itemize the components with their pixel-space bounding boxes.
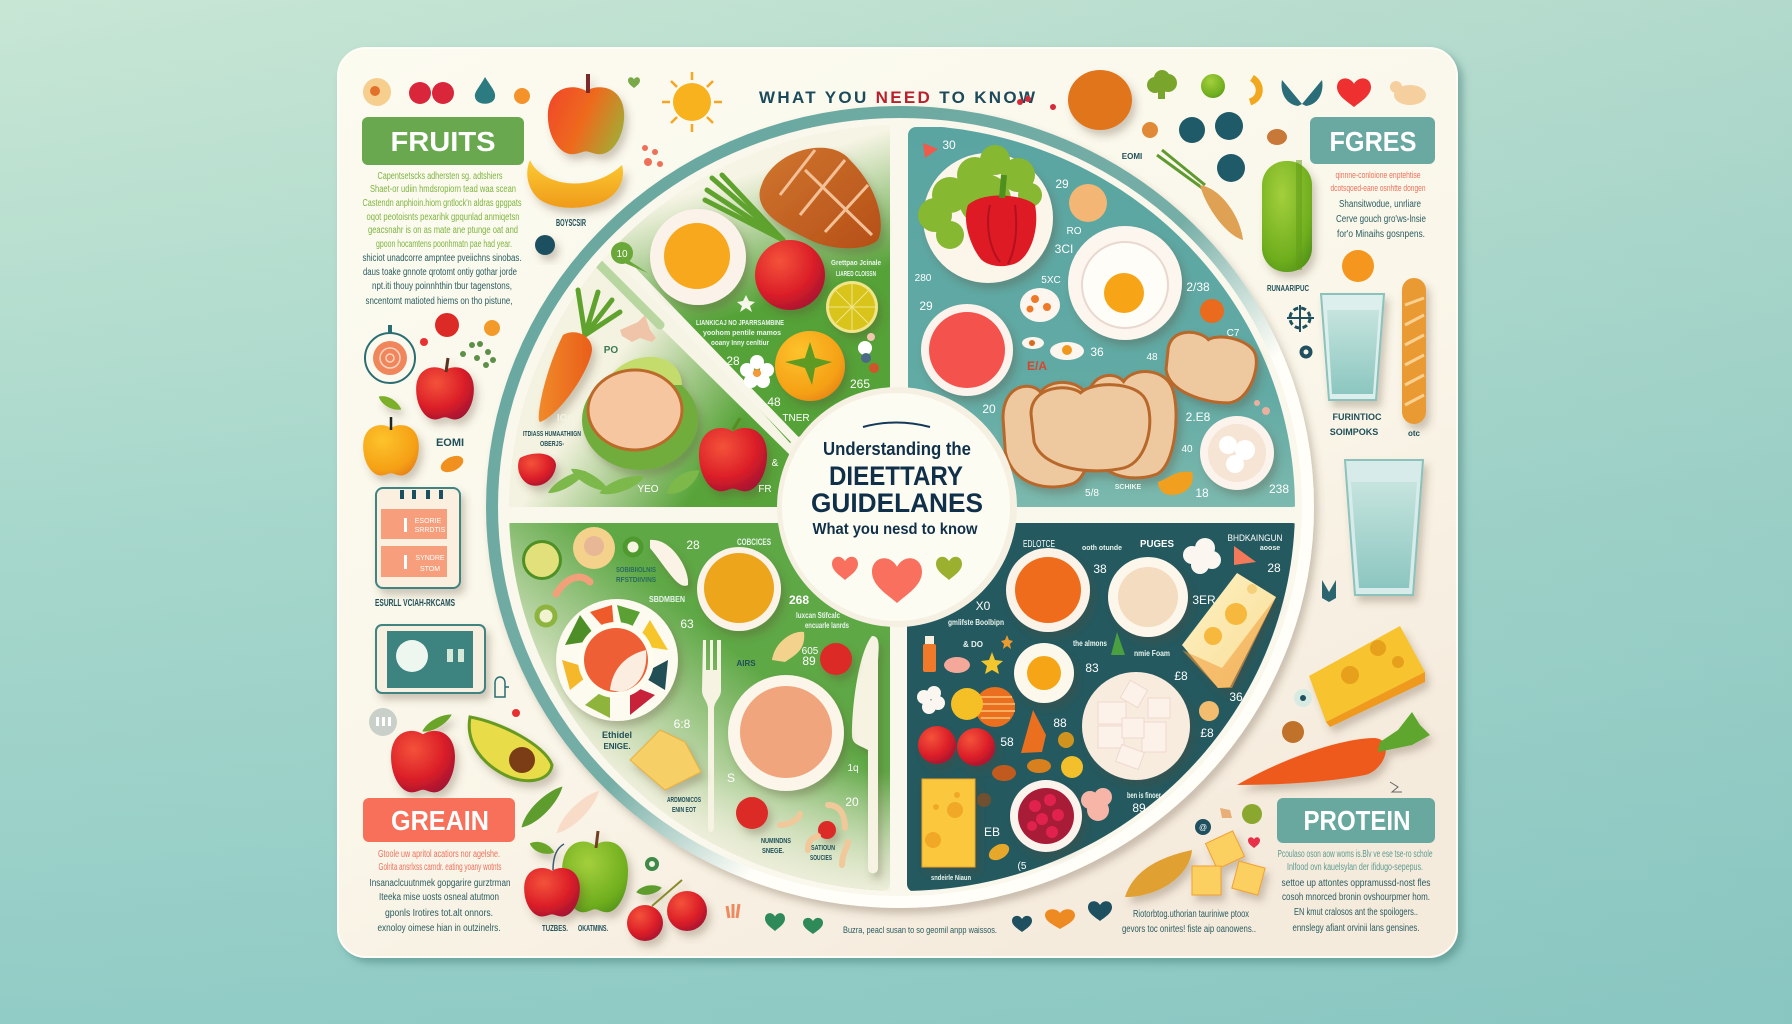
icon: small dish (1020, 288, 1060, 322)
icon: red heart (1248, 837, 1260, 848)
label: notepad caption: ESURLL VCIAH-RKCAMS (375, 598, 455, 609)
icon: lettuce bits (545, 464, 704, 499)
icon: orange wedge (1021, 710, 1046, 753)
text block: fgres description: Shansitwodue, unrliare (1339, 199, 1421, 210)
text: bottom-left labels: SATIOUN (811, 845, 835, 852)
icon: cucumber (522, 540, 562, 580)
text: bottom caption: Buzra, peacl susan to so geomil anpp waissos. (843, 925, 997, 935)
text block: fgres description: Cerve gouch gro'ws-lnsie (1336, 214, 1426, 225)
icon: bottom-left apple (391, 711, 455, 792)
hub title text: GUIDELANES (811, 488, 983, 518)
icon: bread loaf (760, 148, 881, 248)
text block: fgres description: qinnne-conloione enptehtise (1336, 170, 1420, 180)
text: top-left labels: TNER (782, 413, 810, 424)
icon: small balls (977, 701, 1219, 864)
section: grain (363, 782, 1112, 941)
text: top-left labels: PO (604, 345, 618, 356)
text block: fruits description: oqot peotoisnts pexarihk gpqunlad anmiqetsn (366, 212, 520, 223)
text: bottom-left labels: SOUCIES (810, 855, 832, 862)
label: eomi right: EOMI (1122, 152, 1142, 161)
label: glass caption (1330, 412, 1421, 438)
icon: pink fish (944, 657, 970, 673)
icon: pink leaf (552, 786, 604, 838)
icon: yellow swirl (1250, 78, 1259, 102)
icon: cauliflower small (917, 686, 945, 714)
icon: large apple (548, 74, 624, 154)
icon: pink curls (780, 805, 848, 865)
text block: fruits description: gpoon hocamtens poonhmatn pae had year. (376, 239, 512, 250)
icon: wheat (1157, 150, 1243, 240)
label: vegetable caption: RUNAARIPUC (1267, 284, 1309, 293)
card panel (338, 48, 1457, 957)
label: glass caption: SOIMPOKS (1330, 427, 1378, 437)
text: bottom-left labels: encuarle lanrds (805, 621, 849, 630)
text: bottom-right labels: sndeirle Niaun (931, 875, 971, 882)
icon: red apple (416, 358, 474, 419)
icon: yellow tomato (775, 331, 845, 401)
text block: protein description: EN kmut cralosos ant the spoilogers.. (1294, 907, 1418, 918)
label: glass caption: otc (1408, 429, 1421, 438)
text: bottom-right labels: the almons (1073, 639, 1107, 648)
text: bottom-right labels (931, 533, 1282, 882)
label: eomi: EOMI (436, 437, 464, 449)
icon: cracker cheese (630, 730, 701, 790)
icon: green herb (1242, 804, 1262, 824)
icon: nut (1069, 184, 1107, 222)
icon: red dots (1017, 96, 1056, 110)
panel: top-right teal quadrant (908, 127, 1300, 507)
text: bottom-right labels: 83 (1085, 661, 1099, 675)
text: bottom-right labels: aoose (1260, 545, 1280, 552)
text: top-right numbers: 20 (982, 402, 996, 416)
top-right foods (915, 138, 1289, 500)
icon: shrimp (556, 577, 590, 594)
text: bottom-left labels (602, 537, 859, 862)
icon: blueberries (1179, 112, 1245, 182)
text: bottom-right labels: PUGES (1140, 539, 1174, 550)
text: top-right numbers: C7 (1227, 328, 1240, 339)
text: top-left labels: 48 (767, 395, 781, 409)
icon: beige bowl (1108, 557, 1188, 637)
icon: donut (363, 78, 391, 106)
icon: grey circle (369, 708, 397, 736)
icon: notepad: SRRDTIS (415, 527, 446, 534)
icon: at badge: @ (1199, 823, 1207, 832)
text: bottom-right labels: (5 (1018, 861, 1027, 872)
text: bottom-left labels: RFSTDIIVINS (616, 577, 656, 584)
icon: notepad: STOM (420, 566, 440, 573)
icon: tag 10 (611, 242, 648, 273)
icon: water glass (1321, 294, 1384, 400)
icon: ginger (620, 315, 656, 342)
text block: fruits description (362, 171, 522, 307)
icon: butterfly (1282, 80, 1322, 106)
text: top-left labels: FR (758, 484, 772, 495)
text: top-right numbers: 29 (1055, 177, 1069, 191)
icon: large glass (1345, 460, 1423, 595)
icon: layered cake (1111, 632, 1125, 655)
icon: lemon slice (826, 281, 878, 333)
icon: eye badge (1294, 689, 1312, 707)
text: bottom-left labels: 63 (680, 617, 694, 631)
text: top-left labels: OBERJS- (540, 441, 565, 448)
icon: flower (740, 355, 774, 388)
icon: green ring (647, 859, 657, 869)
icon: green stalks (705, 175, 783, 240)
label: grain (363, 798, 515, 842)
text block: fgres description: dcotsqoed-eane osnhtte dongen (1330, 183, 1426, 193)
text block: fruits description: Shaet-or udiin hmdsropiorn tead waa scean (370, 184, 516, 195)
text: bottom-left labels: SBDMBEN (649, 595, 685, 604)
text: top-right numbers (915, 138, 1289, 500)
icon: water drop (475, 77, 495, 104)
icon: orange oval (438, 453, 466, 475)
text: top-right numbers: 18 (1195, 486, 1209, 500)
icon: clock (365, 325, 415, 383)
label: apple captions (542, 924, 608, 933)
hub circle (777, 387, 1017, 627)
icon: cheese block (922, 779, 975, 867)
icon: green bits (460, 341, 496, 368)
text: top-right numbers: 5/8 (1085, 488, 1099, 499)
icon: yellow nut (1158, 472, 1193, 495)
text: bottom-right labels: & DO (963, 640, 983, 649)
hub hearts (832, 557, 962, 603)
text block: grain description: Golrita ansrlxss carndr. eating yoany wotnts (378, 862, 502, 873)
icon: lettuce and bread (582, 357, 698, 470)
text: bottom-left labels: 1q (847, 763, 859, 774)
icon: green swirl (625, 539, 641, 555)
text: top-left labels: LIANKICAJ NO JPARRSAMBINE (696, 320, 784, 327)
icon: ring (1302, 348, 1310, 356)
icon: green ball (1201, 74, 1225, 98)
icon: cheese wedge right (1309, 626, 1425, 727)
hub title text: DIEETTARY (829, 461, 963, 491)
text: bottom-left labels: ENIGE. (603, 742, 631, 751)
text: bottom-left labels: SOBIBIIOLNIS (616, 567, 656, 574)
label: apple captions: OKATMINS. (578, 924, 608, 933)
icon: small eggs (1022, 337, 1084, 360)
text block: middle caption: gevors toc onirtes! fiste aip oanowens.. (1122, 924, 1256, 935)
icon: tofu bowl (1082, 672, 1190, 780)
text: bottom-right labels: 36 (1229, 690, 1243, 704)
text: top-right numbers: 29 (919, 299, 933, 313)
text block: fruits description: daus toake gnnote qrotomt ontiy gothar jorde (363, 267, 517, 278)
text block: protein description: ennslegy afiant orvinii lans gensines. (1292, 923, 1420, 934)
text: top-right numbers: 2.E8 (1186, 410, 1211, 424)
icon: pink triangle (1234, 546, 1256, 565)
icon: stars (981, 635, 1013, 674)
text block: grain description: Insanaclcuutnmek gopgarire gurztrman (370, 878, 510, 889)
icon: orange ball (1200, 299, 1224, 323)
icon: cottage cheese bowl (1200, 416, 1274, 490)
text: top-right numbers: 238 (1269, 482, 1289, 496)
text: bottom-right labels: 88 (1053, 716, 1067, 730)
text: bottom-left labels: Ethidel (602, 730, 632, 740)
panel: bottom-right dark teal quadrant (907, 523, 1300, 892)
icon: pills (858, 333, 879, 373)
icon: lentil bowl (728, 675, 844, 791)
icon: berries bowl (1010, 780, 1082, 852)
text block: grain description: Gtoole uw apritol acatiors nor agelshe. (378, 849, 500, 860)
icon: red balls (736, 643, 852, 839)
text block: grain description: Iteeka mise uosts osneal atutmon (379, 892, 499, 903)
icon: fork (702, 640, 721, 832)
icon: tomatoes (918, 726, 995, 766)
text: bottom-right labels: EB (984, 825, 1000, 839)
text: bottom-left labels: 20 (845, 795, 859, 809)
label: fruits (362, 117, 524, 165)
icon: bread slices (1003, 326, 1261, 487)
text block: fruits description: geacsnahr is on as mate ane ptunge oat and (368, 225, 518, 236)
icon: strawberry piece (518, 454, 556, 486)
text block: middle caption: Riotorbtog.uthorian tauriniwe ptoox (1133, 909, 1249, 920)
icon: raspberries (409, 82, 454, 104)
text block: fgres description (1330, 170, 1426, 240)
text: bottom-left labels: ARDMONICOS (667, 797, 701, 804)
icon: banana (527, 160, 623, 208)
icon: cookie (1390, 81, 1426, 105)
label: boyscsir: BOYSCSIR (556, 218, 586, 229)
text: bottom-left labels: 6:8 (674, 717, 691, 731)
icon: white crescent (650, 540, 688, 586)
text block: middle caption (1122, 909, 1256, 935)
text: bottom-left labels: 89 (802, 654, 816, 668)
hub title text: What you nesd to know (812, 521, 978, 538)
icon: butterfly mini (1322, 580, 1336, 602)
hub title text (811, 439, 983, 538)
text: top-right numbers: RO (1066, 226, 1082, 237)
text: top-left labels: YEO (637, 484, 659, 495)
text: bottom-right labels: ben is finoer (1127, 791, 1161, 800)
text: bottom-right labels: BHDKAINGUN (1228, 533, 1282, 543)
icon: swirl (537, 607, 555, 625)
text: bottom-right labels: EDLOTCE (1023, 539, 1055, 550)
text: bottom-right labels: gmlifste Boolbipn (948, 618, 1004, 627)
text block: protein description: Pcoulaso oson aow woms is.Blv ve ese tse-ro schole (1278, 849, 1433, 860)
section: protein (1122, 580, 1435, 935)
icon: carrot (539, 290, 620, 422)
icon: pepper plate (918, 145, 1053, 283)
text block: fgres description: for'o Minaihs gosnpens. (1337, 229, 1425, 240)
text: top-left labels (523, 260, 881, 495)
icon: red apple (699, 418, 767, 491)
icon: yellow apple (363, 393, 419, 475)
text: bottom-right labels: X0 (976, 599, 991, 613)
top-left card icons (363, 72, 722, 792)
text: top-left labels: ITDIASS HUMAATHIIGN (523, 431, 581, 438)
icon: orange soup bowl (1006, 548, 1090, 632)
text block: protein description: cosoh mnorced bronin ovshourpmer hom. (1282, 892, 1430, 903)
icon: target (1287, 305, 1314, 332)
panel: bottom-left green quadrant (503, 523, 890, 891)
label: protein: PROTEIN (1304, 805, 1410, 836)
icon: nuts (1142, 122, 1287, 145)
icon: orange loaf (1068, 70, 1132, 130)
icon: cheese wedge (1182, 573, 1276, 688)
icon: at badge (1195, 819, 1211, 835)
text block: grain description (370, 849, 510, 934)
icon: knife (852, 636, 879, 873)
text: bottom-right labels: 89 (1132, 801, 1146, 815)
text: bottom-right labels: 3ER (1192, 593, 1216, 607)
label: apple captions: TUZBES. (542, 924, 568, 933)
icon: tablet (376, 625, 485, 693)
hub title text: Understanding the (823, 439, 971, 459)
icon: red heart (1337, 78, 1371, 107)
text: top-right numbers: 5XC (1041, 275, 1061, 286)
text: bottom-left labels: 268 (789, 593, 809, 607)
top-left foods (518, 148, 881, 499)
icon: orange juice bowl (650, 209, 746, 305)
text block: fruits description: shiciot unadcorre ampntee pveiichns sinobas. (362, 253, 522, 264)
text: bottom-right labels: £8 (1200, 726, 1214, 740)
text block: protein description (1278, 849, 1433, 934)
text: bottom-left labels: ENIN EOT (672, 807, 697, 814)
text: top-left labels: 28 (726, 354, 740, 368)
icon: star (737, 295, 755, 312)
label: fruits: FRUITS (390, 126, 496, 157)
text: bottom-left labels: SNEGE. (762, 848, 784, 855)
label: grain: GREAIN (391, 805, 489, 836)
label: fgres: FGRES (1330, 126, 1416, 157)
text: bottom-right labels: 28 (1267, 561, 1281, 575)
icon: red dot (512, 709, 520, 717)
icon: orange badge (1342, 250, 1374, 282)
text block: protein description: Inlfood ovn kauelsylan der ifidugo-sepepus. (1287, 862, 1423, 873)
icon: golden leaf (1125, 850, 1192, 897)
text: top-right numbers: 3CI (1055, 242, 1073, 256)
icon: green heart (628, 77, 640, 88)
icons: bottom hearts (765, 901, 1112, 934)
text: top-left labels: ooany Inny cenltiur (711, 340, 769, 347)
icon: broccoli (1147, 70, 1177, 99)
text: bottom-left labels: Iuxcan Stifcalc (796, 611, 840, 620)
icon: walnut (1282, 721, 1304, 743)
bottom-right foods (917, 533, 1282, 882)
icon: red sauce bowl (921, 304, 1013, 396)
icon: red balls (420, 313, 500, 346)
text: bottom-right labels: ooth otunde (1082, 545, 1122, 552)
icon: scribble (1390, 782, 1402, 792)
icon: green leaf (517, 782, 567, 832)
text: bottom-left labels: NUMINDNS (761, 838, 791, 845)
section: fgres (1017, 70, 1435, 792)
text block: fruits description: npt.iti thouy poinnhthin tbur tagenstons, (372, 281, 512, 292)
icon: cherries (627, 880, 707, 941)
plate ring (492, 112, 1308, 902)
text block: grain description: exnoloy oimese hian in outzinelrs. (378, 923, 500, 934)
label: fgres (1310, 117, 1435, 164)
icon: green apple (562, 831, 628, 912)
icon: notepad: SYNDRE (415, 555, 445, 562)
text: bottom-left labels: 28 (686, 538, 700, 552)
icon: small chip (1220, 808, 1232, 818)
text: top-left labels: yoohom pentile mamos (703, 330, 781, 337)
text: bottom-left labels: COBCICES (737, 537, 771, 547)
section: fruits (362, 117, 524, 307)
icon: cheese cubes (1192, 831, 1265, 895)
text: top-left labels: 265 (850, 377, 870, 391)
icon: fried egg (1014, 643, 1074, 703)
text: bottom-right labels: £8 (1174, 669, 1188, 683)
panel: top-left green quadrant (495, 118, 890, 507)
label: protein (1277, 798, 1435, 843)
text: bottom-right labels: 38 (1093, 562, 1107, 576)
icon: red apple (524, 839, 580, 916)
icon: sun (662, 72, 722, 132)
label: glass caption: FURINTIOC (1332, 412, 1382, 422)
icon: bottle (923, 636, 936, 672)
icon: green vegetable (1262, 160, 1312, 272)
icon: scatter (642, 145, 663, 167)
icon: red tomato (755, 240, 825, 310)
icon: orange swirl (514, 88, 530, 104)
text block: fruits description: sncentomt matioted hiems on tho pistune, (366, 296, 512, 307)
text: top-right numbers: 280 (915, 273, 932, 284)
icon: cauliflower (1183, 538, 1221, 574)
icon: notepad (376, 488, 460, 588)
icon: cookie (573, 527, 615, 569)
text: bottom-right labels: 58 (1000, 735, 1014, 749)
icon: carrot (1237, 712, 1430, 785)
text block: grain description: gponls Irotires tot.alt onnors. (385, 908, 493, 919)
text: top-right numbers: 30 (942, 138, 956, 152)
text: top-right numbers: 48 (1146, 352, 1158, 363)
icon: red triangle (923, 143, 938, 158)
text: bottom-right labels: nmie Foam (1134, 649, 1170, 658)
text: top-right numbers: 2/38 (1186, 280, 1210, 294)
icon: baguette (1402, 278, 1426, 424)
text block: fruits description: Capentsetscks adhersten sg. adtshiers (378, 171, 502, 182)
icon: salad plate (556, 599, 678, 721)
icon: blueberry (535, 235, 555, 255)
text: bottom-left labels: S (727, 771, 735, 785)
icon: yellow disc and striped disc (951, 687, 1015, 727)
decorative arc (863, 422, 930, 427)
bottom-left foods (522, 527, 879, 873)
text: top-right numbers: 40 (1181, 444, 1193, 455)
icon: grain bowl (697, 547, 781, 631)
text: bottom-left labels: AIRS (736, 659, 756, 668)
plate (492, 112, 1308, 902)
icon: notepad: ESORIE (415, 518, 442, 525)
text: top-left labels: LIARED CLOISSN (836, 271, 876, 278)
icon: lock (495, 677, 509, 697)
text: top-left labels: IOO (557, 413, 575, 424)
icon: orange marks (727, 904, 739, 918)
text: top-right numbers: E/A (1027, 359, 1047, 373)
icon: cream nut (772, 632, 804, 662)
text: top-right numbers: 36 (1090, 345, 1104, 359)
text: bottom-left labels: 605 (802, 646, 819, 657)
text: top-left labels: Grettpao Jcinale (831, 260, 881, 267)
text: top-left labels: & (772, 458, 779, 469)
text block: protein description: settoe up attontes oppramussd-nost fles (1282, 878, 1430, 889)
title: what you need to know: WHAT YOU NEED TO KNOW (759, 88, 1036, 107)
text: top-right numbers: SCHIKE (1115, 484, 1142, 491)
icon: tag 10: 10 (616, 249, 628, 260)
icon: pink dumpling (1081, 788, 1112, 821)
icon: avocado (469, 717, 552, 781)
text block: fruits description: Castendn anphioin.hiom gntlock'n aldras gpgpats (362, 198, 522, 209)
icon: egg plate (1068, 226, 1182, 340)
icon: pink bits (1254, 400, 1270, 415)
